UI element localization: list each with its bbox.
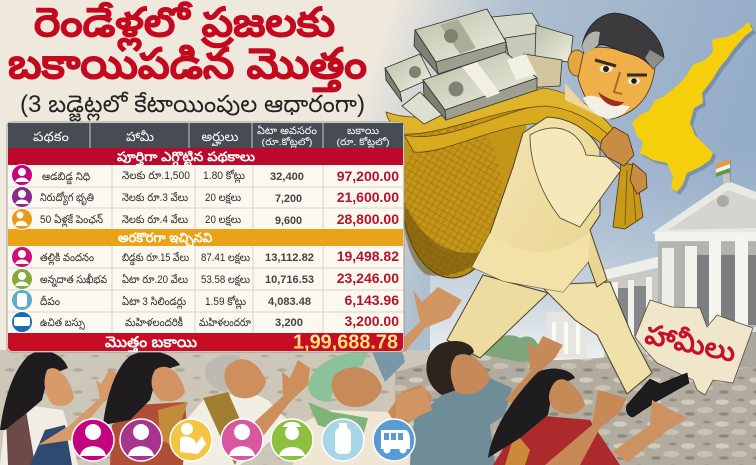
table header: పథకం xyxy=(33,129,69,144)
row icons xyxy=(12,164,32,332)
table header xyxy=(8,123,403,149)
row 4: బిడ్డకు రూ.15 వేలు xyxy=(122,251,189,266)
row 3: 9,600 xyxy=(275,215,302,227)
hair xyxy=(582,13,664,69)
row 2 xyxy=(40,189,399,206)
row 3: నెలకు రూ.4 వేలు xyxy=(122,213,188,226)
face xyxy=(578,47,655,119)
crowd of people xyxy=(0,287,687,465)
person: young man xyxy=(396,287,563,465)
table header: (రూ.కోట్లలో) xyxy=(262,136,312,149)
total row xyxy=(8,332,403,354)
neck xyxy=(565,83,603,118)
row 4 xyxy=(40,248,399,266)
row 3: 28,800.00 xyxy=(337,211,399,227)
title xyxy=(8,1,367,93)
shoe xyxy=(626,373,689,417)
mouth xyxy=(598,92,624,106)
hand on bag xyxy=(600,127,634,166)
total row: మొత్తం బకాయి xyxy=(105,334,198,353)
row 3 xyxy=(40,211,399,228)
title: బకాయిపడిన మొత్తం xyxy=(8,40,367,93)
torso/jacket xyxy=(472,117,607,292)
eyes xyxy=(600,65,612,73)
data table xyxy=(7,122,404,354)
table header: అర్హులు xyxy=(202,129,239,147)
row 4: 13,112.82 xyxy=(265,252,314,264)
row 6: 6,143.96 xyxy=(344,292,399,308)
row 2: 20 లక్షలు xyxy=(205,192,241,204)
row 6: 4,083.48 xyxy=(268,296,311,308)
row 1: 1.80 కోట్లు xyxy=(203,169,245,184)
subtitle: (3 బడ్జెట్లలో కేటాయింపుల ఆధారంగా) xyxy=(20,91,365,122)
leaning man xyxy=(447,13,689,417)
scheme icon badges xyxy=(72,419,415,461)
torn paper: promises xyxy=(635,300,753,395)
flag xyxy=(716,159,730,182)
row 2: నిరుద్యోగ భృతి xyxy=(40,191,94,206)
row 3: 50 ఏళ్లకే పెంఛన్ xyxy=(40,213,103,228)
table header: (రూ. కోట్లలో) xyxy=(336,136,390,149)
row 4: 19,498.82 xyxy=(337,248,399,264)
row 1: 32,400 xyxy=(270,171,304,183)
money bundles xyxy=(385,9,573,124)
row 1: నెలకు రూ.1,500 xyxy=(122,170,190,182)
rubble ground xyxy=(395,352,756,465)
row 2: 7,200 xyxy=(275,193,302,205)
beard xyxy=(583,96,630,119)
band: partly given xyxy=(8,229,403,247)
row 5: 10,716.53 xyxy=(265,274,314,286)
back leg xyxy=(447,275,548,358)
person: woman xyxy=(103,351,190,465)
band: fully skipped schemes: పూర్తిగా ఎగ్గొట్టిన పథకాలు xyxy=(117,149,256,167)
row 3: 20 లక్షలు xyxy=(205,214,241,226)
band: fully skipped schemes xyxy=(8,148,403,167)
sleeve xyxy=(530,128,621,227)
row 4: తల్లికి వందనం xyxy=(40,252,94,266)
map of Andhra Pradesh xyxy=(632,22,756,195)
row 7: మహిళలందరూ xyxy=(199,317,252,329)
row 2: 21,600.00 xyxy=(337,189,399,205)
table header: ఏటా అవసరం xyxy=(257,125,317,137)
person: woman in saree xyxy=(488,369,687,465)
badge glyphs xyxy=(80,422,410,456)
person: old man xyxy=(183,355,310,465)
row 1: ఆడబిడ్డ నిధి xyxy=(42,171,90,185)
row 6: దీపం xyxy=(40,295,60,308)
row 7: 3,200.00 xyxy=(344,313,399,329)
row 5: 53.58 లక్షలు xyxy=(201,274,250,286)
person: turban man xyxy=(293,345,432,465)
distant trees xyxy=(482,335,540,365)
torn paper: promises: హామీలు xyxy=(642,318,739,368)
title: రెండేళ్లలో ప్రజలకు xyxy=(34,1,335,52)
row 7: ఉచిత బస్సు xyxy=(40,317,85,330)
row 6: ఏటా 3 సిలిండర్లు xyxy=(122,295,186,310)
row 7: మహిళలందరికీ xyxy=(125,316,183,329)
row 5 xyxy=(40,270,399,287)
row 1 xyxy=(42,168,399,185)
table header: బకాయి xyxy=(347,125,380,137)
band: partly given: అరకొరగా ఇచ్చినవి xyxy=(118,230,213,247)
row 6 xyxy=(40,292,399,310)
ear xyxy=(568,50,586,76)
person: schoolgirl xyxy=(0,351,123,465)
row 1: 97,200.00 xyxy=(337,168,399,184)
money bag xyxy=(386,88,643,278)
row 5: 23,246.00 xyxy=(337,270,399,286)
table rows xyxy=(40,168,399,330)
row 4: 87.41 లక్షలు xyxy=(201,252,250,264)
table header: హామీ xyxy=(126,129,154,144)
government building xyxy=(547,174,756,375)
row 6: 1.59 కోట్లు xyxy=(205,295,246,310)
total row: 1,99,688.78 xyxy=(293,332,398,354)
row 5: ఏటా రూ.20 వేలు xyxy=(122,273,188,286)
row 2: నెలకు రూ.3 వేలు xyxy=(122,191,188,204)
row 5: అన్నదాత సుఖీభవ xyxy=(40,273,107,287)
row 7: 3,200 xyxy=(275,317,303,329)
row 7 xyxy=(40,313,399,330)
front leg xyxy=(540,282,652,394)
